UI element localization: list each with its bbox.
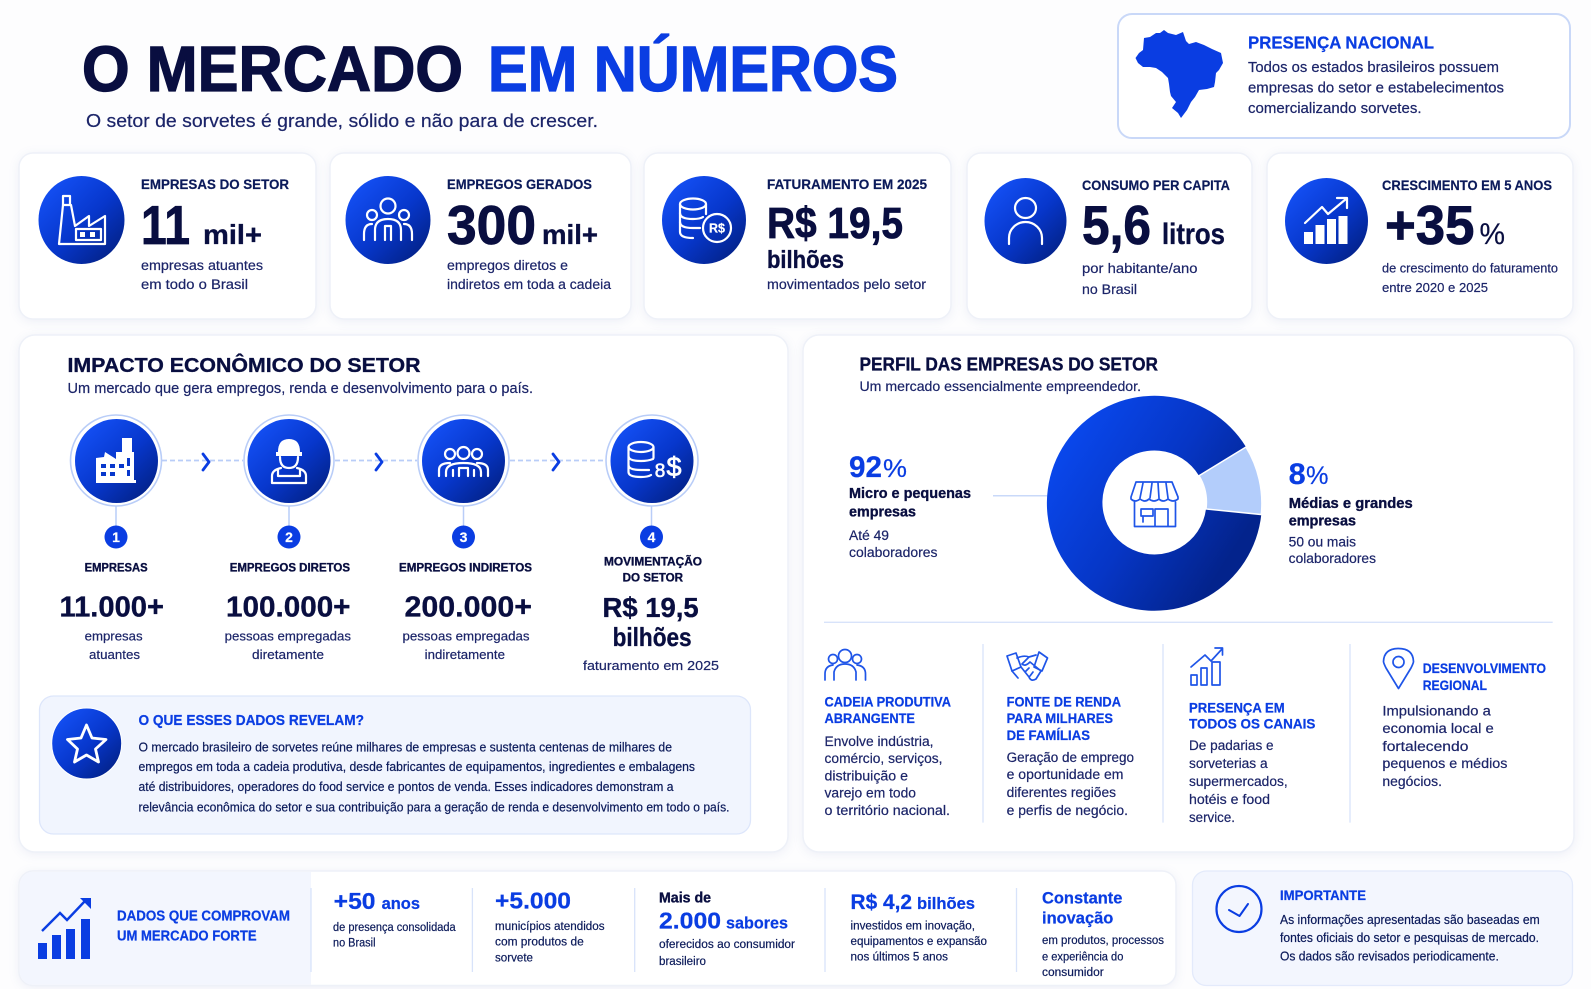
stat: 50 anos: anos: [382, 894, 420, 913]
step number 3: [452, 526, 475, 548]
stat: 2.000 sabores: sabores: [726, 914, 788, 932]
stat: 5.000 municípios: sorvete: [495, 952, 533, 964]
92% label: 92: [849, 451, 882, 484]
callout text: relevância econômica do setor e sua contribuição para a geração de renda e desenvolvimento em todo o país.: [138, 800, 730, 814]
92% label: empresas: [849, 504, 916, 520]
presença text: De padarias e: [1189, 738, 1274, 753]
callout text: até distribuidores, operadores do food service e pontos de venda. Esses indicadores demonstram a: [138, 780, 674, 794]
step 1: empresas: [60, 415, 164, 662]
panel: empregos gerados: [330, 153, 631, 319]
fonte heading: DE FAMÍLIAS: [1007, 728, 1090, 743]
panel: perfil das empresas: [803, 335, 1574, 852]
perfil heading: PERFIL DAS EMPRESAS DO SETOR: [860, 354, 1158, 374]
8% label: 8: [1289, 458, 1306, 491]
icon: chart outline: [1191, 648, 1222, 685]
icon: coins circle: [606, 415, 698, 506]
presença text: Todos os estados brasileiros possuem: [1248, 60, 1499, 76]
empresas value: [141, 194, 262, 256]
fonte text: diferentes regiões: [1007, 785, 1116, 800]
presença heading: PRESENÇA EM: [1189, 700, 1285, 716]
panel: consumo per capita: [967, 153, 1252, 319]
icon: coins circle: 8: [655, 461, 665, 482]
stat: 2.000 sabores: [659, 890, 795, 968]
empregos description: [447, 258, 611, 292]
crescimento description: [1382, 260, 1558, 295]
flow connectors: [116, 454, 652, 526]
fonte heading: FONTE DE RENDA: [1007, 694, 1121, 710]
consumo value: [1082, 194, 1225, 256]
desenvolvimento heading: DESENVOLVIMENTO: [1423, 661, 1546, 676]
icon: coins circle: $: [666, 452, 682, 482]
panel: empresas do setor: [19, 153, 316, 319]
donut chart: [1047, 396, 1262, 611]
stat: 2.000 sabores: brasileiro: [659, 956, 706, 968]
presença text: supermercados,: [1189, 774, 1288, 789]
fonte text: [1007, 750, 1134, 818]
stat: 4,2 bilhões: equipamentos e expansão: [850, 936, 987, 948]
crescimento label: CRESCIMENTO EM 5 ANOS: [1382, 178, 1552, 193]
step description: [225, 628, 351, 662]
step label: EMPRESAS: [85, 560, 148, 574]
presença text: hotéis e food: [1189, 792, 1270, 807]
stat: 4,2 bilhões: [850, 891, 987, 964]
stat: constante inovação: Constante: [1042, 888, 1122, 908]
dados heading: [117, 908, 290, 944]
icon: handshake: [1007, 652, 1048, 680]
92% label: Até 49: [849, 528, 889, 543]
icon: growth chart: [1285, 178, 1368, 264]
step label: EMPREGOS INDIRETOS: [399, 560, 532, 574]
panel: presença nacional: [1118, 14, 1570, 138]
column: cadeia produtiva: [824, 650, 951, 818]
desenvolvimento heading: [1423, 661, 1546, 693]
icon: coins: [662, 176, 746, 264]
desenvolvimento text: Impulsionando a: [1382, 704, 1491, 718]
icon: coins: R$: [709, 222, 725, 236]
column: fonte de renda: [1007, 652, 1134, 818]
panel: faturamento: [644, 153, 951, 319]
empregos value: [447, 194, 598, 256]
step 4: movimentação: [583, 415, 719, 673]
callout text: empregos em toda a cadeia produtiva, desde fabricantes de equipamentos, ingredientes e embalagens: [138, 760, 695, 774]
dados heading: DADOS QUE COMPROVAM: [117, 908, 290, 924]
cadeia heading: [824, 694, 951, 726]
desenvolvimento text: economia local e: [1382, 721, 1494, 736]
step value: 11.000+: [60, 592, 164, 624]
cadeia text: [824, 734, 950, 818]
step description: diretamente: [252, 647, 324, 662]
step description: [85, 628, 143, 662]
desenvolvimento text: negócios.: [1382, 774, 1442, 789]
icon: location pin: [1384, 648, 1414, 688]
step 2: empregos diretos: [225, 415, 351, 662]
step number 1: [104, 526, 128, 548]
desenvolvimento heading: REGIONAL: [1423, 678, 1487, 693]
presença text: [1248, 60, 1504, 117]
stat: 2.000 sabores: 2.000: [659, 908, 721, 934]
step value: R$ 19,5: [602, 592, 699, 623]
stat: 4,2 bilhões: investidos em inovação,: [850, 920, 975, 932]
crescimento value: %: [1480, 218, 1505, 251]
desenvolvimento text: [1382, 704, 1508, 789]
step label: [604, 554, 702, 584]
fonte text: e perfis de negócio.: [1007, 803, 1128, 818]
empregos description: indiretos em toda a cadeia: [447, 277, 611, 292]
92% label: Micro e pequenas: [849, 485, 971, 502]
8% label: [1289, 458, 1413, 566]
presença text: comercializando sorvetes.: [1248, 101, 1422, 117]
consumo description: [1082, 261, 1198, 297]
column: presença em todos os canais: [1189, 648, 1315, 825]
empregos value: 300: [447, 194, 536, 256]
impacto heading: IMPACTO ECONÔMICO DO SETOR: [68, 353, 421, 377]
step 3: empregos indiretos: [399, 415, 532, 662]
step number 2: [278, 526, 300, 548]
dados heading: UM MERCADO FORTE: [117, 928, 257, 944]
stat: 50 anos: +50: [334, 888, 376, 914]
icon: store: [1131, 482, 1178, 526]
icon: star: [52, 708, 122, 779]
faturamento value: [767, 199, 903, 274]
stat: 50 anos: [333, 888, 456, 950]
callout text: O mercado brasileiro de sorvetes reúne milhares de empresas e sustenta centenas de milhares de: [138, 740, 672, 754]
icon: people: [346, 176, 430, 264]
callout heading: O QUE ESSES DADOS REVELAM?: [138, 713, 364, 729]
panel: crescimento: [1267, 153, 1573, 319]
step description: faturamento em 2025: [583, 658, 719, 673]
step description: pessoas empregadas: [402, 628, 530, 644]
faturamento value: bilhões: [767, 246, 844, 274]
step number 4: 4: [648, 529, 656, 545]
stat: 5.000 municípios: +5.000: [495, 888, 571, 914]
empresas description: empresas atuantes: [141, 258, 263, 273]
fonte text: Geração de emprego: [1007, 750, 1134, 765]
step label: MOVIMENTAÇÃO: [604, 554, 702, 568]
stat: 5.000 municípios: com produtos de: [495, 936, 584, 948]
step number 3: 3: [460, 529, 468, 545]
8% label: empresas: [1289, 512, 1356, 530]
cadeia text: comércio, serviços,: [824, 751, 942, 766]
stat: 5.000 municípios: [495, 888, 605, 964]
icon: check circle: [1216, 886, 1262, 932]
presença text: empresas do setor e estabelecimentos: [1248, 80, 1504, 96]
icon: factory circle: [70, 415, 162, 506]
stat: constante inovação: inovação: [1042, 908, 1113, 928]
empresas value: 11: [141, 194, 190, 256]
stat: 4,2 bilhões: nos últimos 5 anos: [850, 952, 948, 964]
panel: impacto econômico: [19, 335, 788, 852]
desenvolvimento text: fortalecendo: [1382, 739, 1468, 754]
empresas description: em todo o Brasil: [141, 277, 248, 292]
icon: worker circle: [244, 415, 334, 506]
stat: constante inovação: consumidor: [1042, 967, 1104, 979]
consumo value: litros: [1162, 218, 1225, 251]
stat: constante inovação: em produtos, processos: [1042, 935, 1164, 947]
cadeia heading: CADEIA PRODUTIVA: [824, 694, 951, 710]
92% label: colaboradores: [849, 545, 938, 560]
empregos value: mil+: [542, 219, 598, 250]
cadeia text: o território nacional.: [824, 803, 950, 818]
92% label: %: [883, 455, 907, 483]
step value: bilhões: [613, 622, 692, 652]
importante text: As informações apresentadas são baseadas em: [1280, 913, 1540, 927]
importante text: [1280, 913, 1540, 964]
presença text: sorveterias a: [1189, 756, 1268, 771]
fonte text: e oportunidade em: [1007, 767, 1124, 782]
leader line: [993, 495, 1047, 497]
8% label: colaboradores: [1289, 551, 1376, 566]
step label: DO SETOR: [623, 570, 683, 584]
icon: map of Brazil: [1136, 30, 1223, 118]
consumo value: 5,6: [1082, 194, 1151, 256]
consumo description: no Brasil: [1082, 282, 1137, 297]
crescimento description: de crescimento do faturamento: [1382, 260, 1558, 276]
presença heading: TODOS OS CANAIS: [1189, 716, 1315, 732]
presença heading: PRESENÇA NACIONAL: [1248, 32, 1434, 52]
8% label: %: [1306, 462, 1328, 490]
step number 4: [640, 526, 663, 548]
impacto subtitle: Um mercado que gera empregos, renda e desenvolvimento para o país.: [68, 381, 533, 397]
step description: pessoas empregadas: [225, 628, 351, 644]
consumo description: por habitante/ano: [1082, 261, 1198, 276]
title: O MERCADO: [82, 33, 463, 105]
step description: indiretamente: [425, 647, 505, 662]
cadeia heading: ABRANGENTE: [824, 711, 915, 726]
icon: bar chart arrow: [38, 898, 91, 959]
step label: EMPREGOS DIRETOS: [230, 560, 350, 574]
empregos description: empregos diretos e: [447, 258, 568, 273]
fonte heading: [1007, 694, 1121, 743]
step description: atuantes: [89, 647, 141, 662]
subtitle: O setor de sorvetes é grande, sólido e não para de crescer.: [86, 110, 598, 131]
icon: team circle: [418, 415, 509, 506]
consumo label: CONSUMO PER CAPITA: [1082, 178, 1230, 193]
stat: 5.000 municípios: municípios atendidos: [495, 921, 605, 933]
92% label: [849, 451, 971, 560]
crescimento description: entre 2020 e 2025: [1382, 280, 1488, 295]
icon: person: [984, 178, 1066, 264]
step number 1: 1: [112, 529, 120, 545]
step description: [402, 628, 530, 662]
callout text: [138, 740, 730, 814]
stat: 4,2 bilhões: R$ 4,2: [850, 891, 912, 914]
perfil subtitle: Um mercado essencialmente empreendedor.: [860, 378, 1141, 394]
step value: 100.000+: [226, 592, 350, 624]
empregos label: EMPREGOS GERADOS: [447, 177, 592, 192]
step description: empresas: [85, 628, 143, 644]
fonte heading: PARA MILHARES: [1007, 711, 1113, 726]
8% label: 50 ou mais: [1289, 534, 1356, 550]
8% label: Médias e grandes: [1289, 495, 1413, 512]
presença heading: [1189, 700, 1315, 732]
importante heading: IMPORTANTE: [1280, 887, 1366, 903]
desenvolvimento text: pequenos e médios: [1382, 756, 1508, 771]
callout: o que esses dados revelam: [40, 696, 750, 834]
stat: 50 anos: no Brasil: [333, 938, 376, 950]
empresas description: [141, 258, 263, 292]
title: [82, 33, 898, 105]
presença text: service.: [1189, 810, 1235, 825]
icon: factory: [38, 176, 124, 264]
panel: dados que comprovam: [19, 871, 1176, 986]
empresas label: EMPRESAS DO SETOR: [141, 177, 289, 192]
stat: 4,2 bilhões: bilhões: [917, 894, 975, 913]
column: desenvolvimento regional: [1382, 648, 1546, 789]
faturamento value: R$ 19,5: [767, 199, 903, 248]
presença text: [1189, 738, 1288, 825]
importante text: fontes oficiais do setor e pesquisas de mercado.: [1280, 931, 1539, 945]
cadeia text: distribuição e: [824, 768, 908, 784]
cadeia text: Envolve indústria,: [824, 734, 934, 749]
stat: 2.000 sabores: Mais de: [659, 890, 711, 906]
panel: importante: [1192, 871, 1572, 986]
title: EM NÚMEROS: [488, 33, 898, 105]
step value: [602, 592, 699, 652]
cadeia text: varejo em todo: [824, 786, 916, 800]
empresas value: mil+: [203, 219, 262, 250]
stat: 2.000 sabores: oferecidos ao consumidor: [659, 939, 795, 951]
faturamento description: movimentados pelo setor: [767, 277, 927, 292]
stat: 50 anos: de presença consolidada: [333, 922, 456, 934]
importante text: Os dados são revisados periodicamente.: [1280, 950, 1499, 964]
stat: constante inovação: e experiência do: [1042, 952, 1123, 964]
step value: 200.000+: [404, 592, 532, 624]
faturamento label: FATURAMENTO EM 2025: [767, 177, 927, 192]
crescimento value: +35: [1385, 194, 1474, 256]
step number 2: 2: [285, 529, 293, 545]
stat: constante inovação: [1042, 888, 1164, 979]
icon: people outline: [825, 650, 866, 680]
